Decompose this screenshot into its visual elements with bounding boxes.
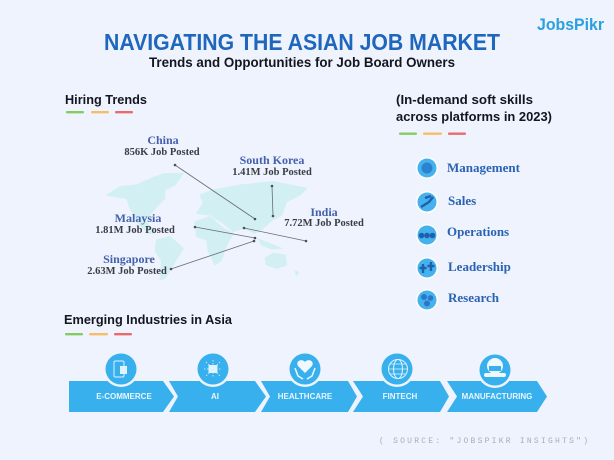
process arrow: Healthcare — [261, 351, 357, 412]
process arrow: E-Commerce: E-COMMERCE — [96, 392, 152, 401]
process arrow: E-Commerce — [69, 351, 174, 412]
label: China — [124, 133, 200, 158]
process arrow: Fintech — [353, 351, 449, 412]
process arrow: AI — [169, 351, 266, 412]
connector: India — [243, 227, 307, 242]
label: South Korea: 1.41M Job Posted — [232, 167, 312, 178]
connector: Malaysia — [194, 226, 256, 239]
world map — [107, 173, 307, 280]
skill: Management — [416, 157, 521, 179]
heading: Hiring Trends: Hiring Trends — [65, 92, 147, 107]
process arrow: Fintech: FINTECH — [383, 392, 418, 401]
process arrow: AI: AI — [211, 392, 219, 401]
skill: Leadership: Leadership — [448, 259, 511, 274]
skill: Operations: Operations — [447, 224, 509, 239]
skill: Sales — [416, 191, 476, 213]
process arrow: Manufacturing — [447, 352, 547, 412]
label: Singapore: Singapore — [103, 252, 156, 266]
subtitle: Trends and Opportunities for Job Board Owners — [149, 55, 455, 70]
label: India: India — [310, 205, 338, 219]
label: India — [284, 205, 364, 229]
heading: In-demand soft skills: (In-demand soft skills — [396, 92, 533, 107]
title: NAVIGATING THE ASIAN JOB MARKET — [104, 29, 500, 55]
connector: Singapore — [170, 240, 255, 270]
label: China: China — [147, 133, 179, 147]
connector: China — [174, 164, 256, 220]
label: Singapore — [87, 252, 167, 277]
label: South Korea: South Korea — [240, 153, 304, 167]
label: China: 856K Job Posted — [124, 147, 200, 158]
skill: Operations — [416, 224, 509, 246]
label: Malaysia: Malaysia — [115, 211, 161, 225]
skill: Research — [416, 289, 500, 311]
connector: South Korea — [271, 185, 274, 217]
process arrow: Manufacturing: MANUFACTURING — [462, 392, 532, 401]
skill: Leadership — [416, 257, 511, 279]
source note: ( SOURCE: "JOBSPIKR INSIGHTS") — [379, 437, 588, 446]
label: Malaysia: 1.81M Job Posted — [95, 225, 175, 236]
heading: In-demand soft skills: across platforms in 2023) — [396, 109, 552, 124]
heading: Emerging Industries in Asia: Emerging Industries in Asia — [64, 312, 233, 327]
label: India: 7.72M Job Posted — [284, 218, 364, 229]
skill: Research: Research — [448, 290, 500, 305]
skill: Management: Management — [447, 160, 521, 175]
heading: In-demand soft skills — [396, 92, 552, 135]
label: Singapore: 2.63M Job Posted — [87, 266, 167, 277]
skill: Sales: Sales — [448, 193, 476, 208]
label: South Korea — [232, 153, 312, 178]
label: Malaysia — [95, 211, 175, 236]
logo: JobsPikr: JobsPikr — [537, 15, 604, 34]
heading: Hiring Trends — [65, 92, 147, 113]
process arrow: Healthcare: HEALTHCARE — [278, 392, 333, 401]
